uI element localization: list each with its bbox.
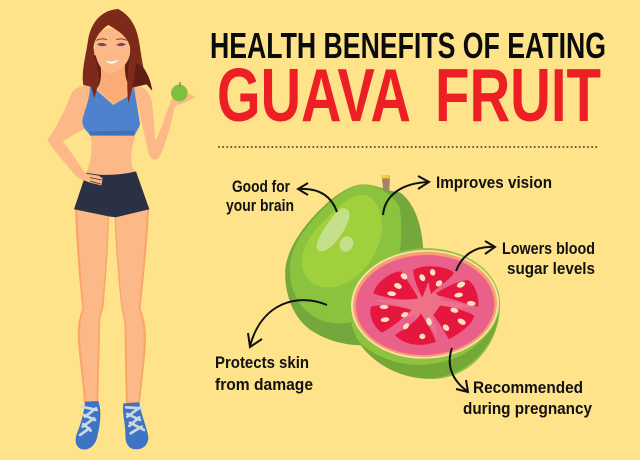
back hair (92, 55, 152, 91)
shoes (76, 401, 148, 450)
label: protects skin from damage (215, 353, 313, 394)
title: guava fruit (217, 53, 601, 137)
centre star (373, 271, 477, 338)
illustration: guava fruit (285, 175, 502, 379)
label: lowers blood sugar levels: sugar levels (507, 259, 595, 278)
label: protects skin from damage: from damage (215, 375, 313, 394)
hair (83, 9, 143, 103)
label: protects skin from damage: Protects skin (215, 353, 309, 372)
arrow: recommended during pregnancy (450, 348, 468, 392)
face (90, 28, 131, 73)
stem (382, 175, 390, 192)
left arm (47, 85, 97, 184)
hand on hip (77, 172, 103, 185)
upper body (47, 82, 195, 217)
head and hair (83, 9, 152, 104)
label: recommended during pregnancy: during pregnancy (463, 399, 592, 418)
icon: green apple (171, 82, 188, 101)
smile (105, 60, 119, 64)
label: good for your brain (226, 177, 294, 215)
illustration: woman holding a green apple (47, 9, 195, 450)
eyes and brows (97, 43, 126, 46)
highlights (317, 208, 349, 251)
label: lowers blood sugar levels (502, 239, 595, 278)
label: good for your brain: Good for (232, 177, 290, 196)
right arm and hand (133, 85, 195, 160)
whole guava (285, 184, 423, 345)
label: good for your brain: your brain (226, 196, 294, 215)
legs (75, 207, 149, 403)
arrow: protects skin (248, 300, 327, 347)
red seed segments (370, 266, 478, 345)
label: recommended during pregnancy (463, 378, 592, 418)
arrow: improves vision (383, 176, 429, 215)
arrow: lowers blood sugar (456, 241, 495, 271)
neck (97, 62, 133, 104)
arrow: good for your brain (298, 183, 337, 212)
label: improves vision: Improves vision (436, 173, 552, 192)
seeds (380, 268, 476, 339)
cut guava half (348, 246, 502, 379)
label: lowers blood sugar levels: Lowers blood (502, 239, 595, 258)
label: recommended during pregnancy: Recommended (473, 378, 583, 397)
sports bra (82, 84, 140, 135)
shorts (74, 171, 149, 217)
title: guava fruit: GUAVA (217, 53, 411, 137)
torso (82, 85, 140, 177)
